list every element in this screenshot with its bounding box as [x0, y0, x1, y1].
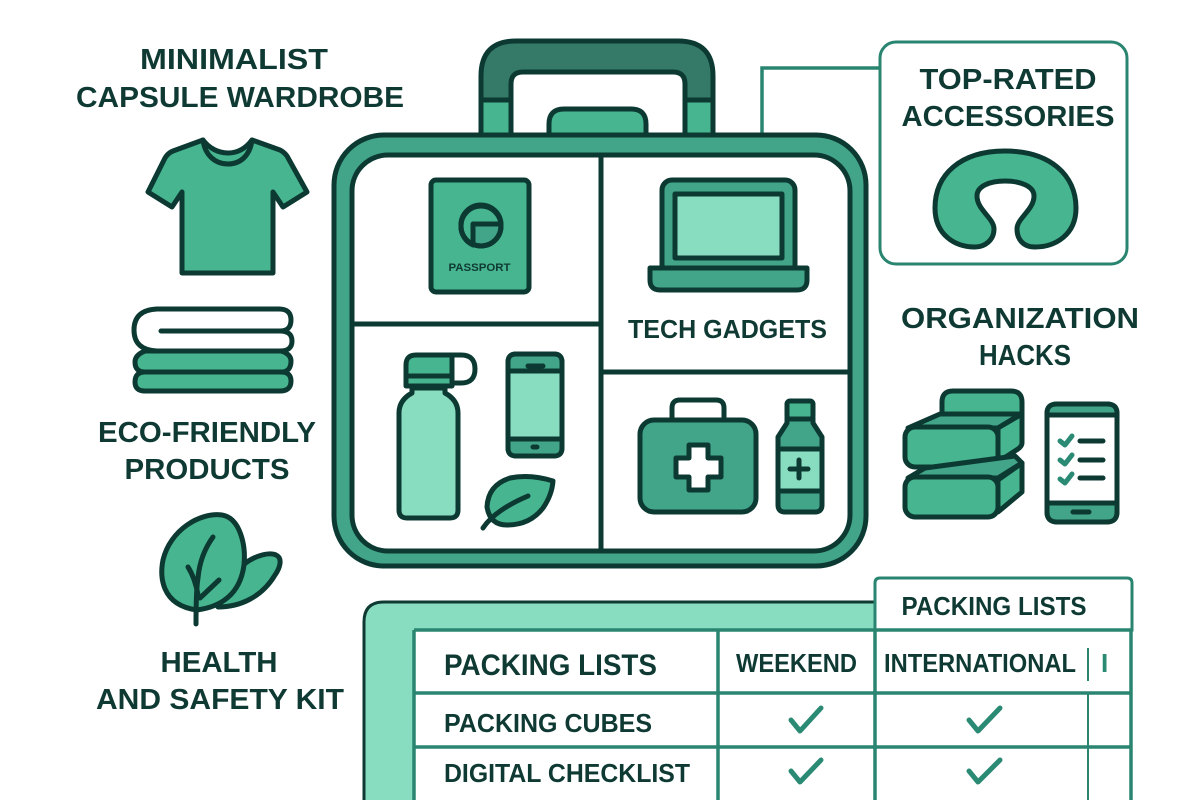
heading: organization hacks: ORGANIZATION	[901, 303, 1139, 335]
icon: smartphone	[508, 354, 562, 456]
heading: top-rated accessories	[902, 64, 1114, 133]
icon: packing cubes	[905, 391, 1022, 517]
row: packing cubes: PACKING CUBES	[444, 708, 652, 738]
arrow: connector from suitcase to accessories	[762, 68, 880, 134]
icon: phone checklist	[1047, 404, 1117, 522]
icon: leaves	[162, 515, 280, 624]
tab heading: PACKING LISTS	[902, 591, 1086, 621]
column headers: PACKING LISTS	[444, 649, 657, 682]
heading: minimalist capsule wardrobe	[76, 44, 404, 114]
icon: laptop	[650, 180, 807, 290]
heading: top-rated accessories: ACCESSORIES	[902, 101, 1114, 133]
column headers: WEEKEND	[736, 648, 857, 678]
suitcase frame	[334, 135, 866, 566]
heading: eco-friendly products	[98, 417, 316, 486]
heading: eco-friendly products: ECO-FRIENDLY	[98, 417, 316, 449]
heading: minimalist capsule wardrobe: MINIMALIST	[140, 44, 328, 76]
heading: eco-friendly products: PRODUCTS	[124, 454, 290, 486]
heading: top-rated accessories: TOP-RATED	[920, 64, 1096, 96]
icon: t-shirt	[148, 140, 307, 273]
icon: first aid kit	[640, 400, 756, 512]
icon: neck pillow	[935, 151, 1076, 247]
icon: folded towels	[134, 309, 292, 391]
suitcase dividers	[352, 155, 850, 551]
column headers: I	[1101, 648, 1108, 678]
icon: small leaf	[483, 477, 553, 528]
heading: health and safety kit: AND SAFETY KIT	[96, 684, 344, 716]
row: digital checklist	[444, 758, 1000, 788]
heading: organization hacks	[901, 303, 1139, 372]
heading: organization hacks: HACKS	[979, 340, 1071, 372]
heading: health and safety kit	[96, 647, 344, 716]
column headers	[444, 648, 1108, 682]
row: packing cubes	[444, 708, 1000, 738]
icon: suitcase	[334, 41, 866, 566]
row: digital checklist: DIGITAL CHECKLIST	[444, 758, 690, 788]
column headers: INTERNATIONAL	[884, 648, 1076, 678]
heading: health and safety kit: HEALTH	[160, 647, 278, 679]
icon: medicine bottle	[778, 401, 822, 512]
heading: minimalist capsule wardrobe: CAPSULE WARDROBE	[76, 82, 404, 114]
table body	[414, 630, 1131, 800]
table grid lines	[414, 630, 1131, 800]
table backing panel	[364, 602, 876, 800]
icon: passport	[431, 180, 529, 292]
icon: passport: PASSPORT	[448, 262, 511, 274]
table tab	[875, 578, 1132, 630]
icon: water bottle	[399, 355, 475, 518]
panel: packing lists table	[364, 578, 1132, 800]
suitcase handle	[481, 41, 713, 135]
label: tech gadgets: TECH GADGETS	[628, 314, 827, 344]
panel: top-rated accessories	[880, 42, 1127, 264]
